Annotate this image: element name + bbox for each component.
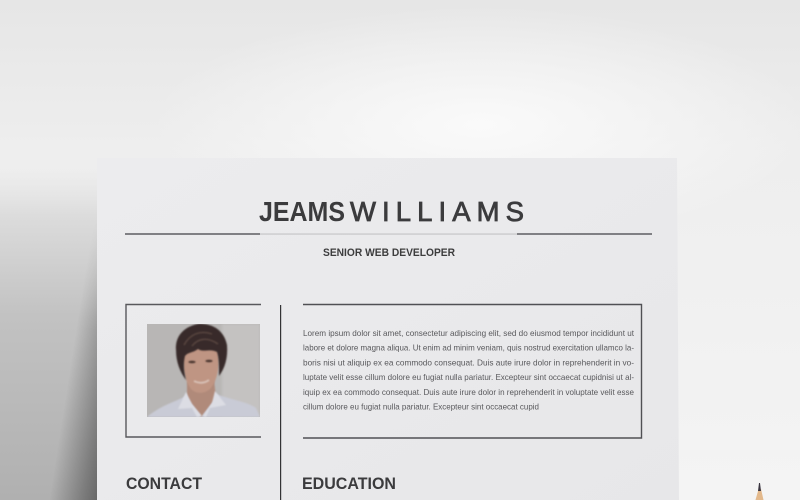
- summary text: iquip ex ea commodo consequat. Duis aute irure dolor in reprehenderit in voluptate velit esse: [303, 387, 634, 397]
- vertical divider: [280, 305, 281, 500]
- contact heading: CONTACT: [126, 474, 203, 493]
- neck: [187, 380, 216, 417]
- portrait photo: [147, 324, 260, 417]
- name heading: WILLIAMS: [350, 196, 524, 227]
- name heading: JEAMS: [259, 196, 345, 227]
- shirt: [147, 394, 260, 417]
- summary text: boris nisi ut aliquip ex ea commodo consequat. Duis aute irure dolor in reprehenderit in vo-: [303, 357, 634, 367]
- photo frame: [126, 304, 261, 437]
- resume paper: [97, 158, 679, 500]
- summary frame: [303, 304, 642, 438]
- summary text: Lorem ipsum dolor sit amet, consectetur adipiscing elit, sed do eiusmod tempor incididunt ut: [303, 328, 635, 338]
- face: [183, 347, 219, 393]
- paper drop shadow: [0, 165, 98, 500]
- summary text: [303, 328, 635, 412]
- summary text: luptate velit esse cillum dolore eu fugiat nulla pariatur. Excepteur sint occaecat cupidnisi ut al-: [303, 372, 634, 382]
- name heading: [259, 196, 524, 227]
- resume mockup scene: [0, 94, 764, 500]
- summary text: cillum dolore eu fugiat nulla pariatur. Excepteur sint occaecat cupid: [303, 402, 539, 412]
- collar: [178, 391, 226, 417]
- hair highlights: [184, 332, 218, 346]
- education heading: EDUCATION: [302, 474, 396, 493]
- facial features: [188, 360, 213, 383]
- icon: pencil tip: [756, 483, 764, 500]
- job title: SENIOR WEB DEVELOPER: [323, 247, 455, 259]
- heading rule: [125, 233, 652, 235]
- summary text: labore et dolore magna aliqua. Ut enim ad minim veniam, quis nostrud exercitation ullamco la-: [303, 343, 634, 353]
- hair: [176, 324, 227, 380]
